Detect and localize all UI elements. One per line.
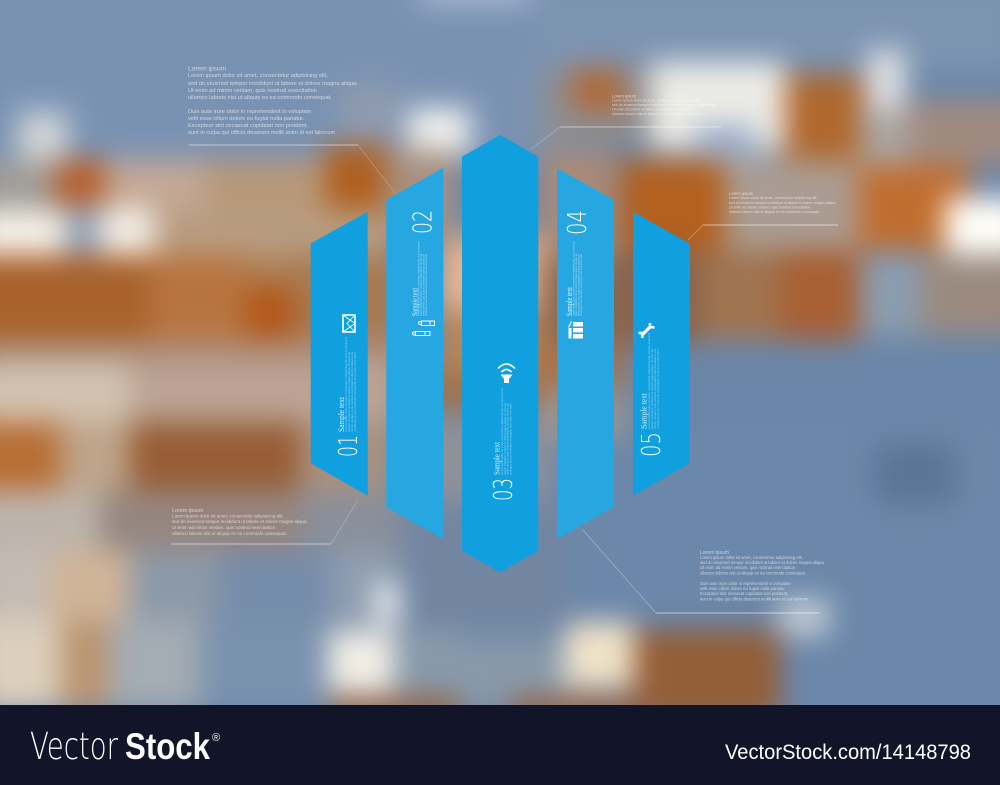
body text 03: minim veniam, quis nostrud exercitation ullamco laboris nisi <box>506 403 510 475</box>
text block: top left: Lorem ipsum <box>188 66 227 72</box>
leader lines <box>171 127 838 613</box>
footer logo: ® <box>212 732 220 744</box>
text block: top left: sunt in culpa qui officia deserunt mollit anim id est laborum <box>188 130 335 136</box>
text block: bottom right: Lorem ipsum <box>700 550 729 556</box>
sample text 01: Sample text <box>337 396 346 432</box>
text block: bottom right: Duis aute irure dolor in reprehenderit in voluptate <box>700 581 791 586</box>
text block: top left: ullamco laboris nisi ut aliquip ex ea commodo consequat. <box>188 95 332 101</box>
text block: right: sed do eiusmod tempor incididunt ut labore et dolore magna aliqua. <box>729 201 836 205</box>
body text 03: tempor incididunt ut labore et dolore magna aliqua. Ut enim ad <box>503 403 507 475</box>
body text 02: Lorem ipsum dolor sit amet, consectetur adipisicing elit, sed do eiusmod <box>416 241 420 316</box>
text block: bottom right: velit esse cillum dolore eu fugiat nulla pariatur. <box>700 586 786 591</box>
sample text 03: Sample text <box>492 441 502 475</box>
text block: bottom left: Lorem ipsum dolor sit amet, consectetur adipisicing elit, <box>172 514 284 518</box>
icon: bar stack <box>568 321 583 338</box>
number 03: 03 <box>489 478 519 501</box>
text block: top left: Lorem ipsum dolor sit amet, consectetur adipisicing elit, <box>188 73 328 79</box>
footer logo: Stock <box>125 726 210 767</box>
panel: bar 01 <box>311 212 368 496</box>
body text 05: tempor incididunt ut labore et dolore magna aliqua. Ut enim ad <box>650 349 654 429</box>
icon: wireless signal <box>498 364 515 383</box>
body text 04: tempor incididunt ut labore et dolore magna aliqua. Ut enim ad <box>574 254 578 316</box>
panel: bar 02 <box>386 168 443 539</box>
text block: bottom left: ullamco laboris nisi ut aliquip ex ea commodo consequat. <box>172 531 287 536</box>
sample text 02: Sample text <box>410 287 419 316</box>
body text 05: ut aliquip ex ea commodo consequat. Duis aute irure dolor <box>656 349 660 429</box>
panel: bar 05 <box>633 212 690 496</box>
text block: bottom right: sunt in culpa qui officia deserunt mollit anim id est laborum <box>700 596 809 602</box>
text block: bottom right: ullamco laboris nisi ut aliquip ex ea commodo consequat. <box>700 570 806 576</box>
body text 04: minim veniam, quis nostrud exercitation ullamco laboris nisi <box>576 254 580 316</box>
body text 03: ut aliquip ex ea commodo consequat. Duis aute irure dolor <box>508 403 512 475</box>
sample text 05: Sample text <box>640 392 648 429</box>
body text 02 <box>416 241 428 316</box>
text block: top left <box>188 66 358 136</box>
text block: top middle: ullamco laboris nisi ut aliquip ex ea commodo consequat. <box>612 112 703 116</box>
footer image id: VectorStock.com/14148798 <box>725 741 971 764</box>
body text 02: minim veniam, quis nostrud exercitation ullamco laboris nisi <box>422 254 426 316</box>
footer bar <box>0 705 1000 785</box>
body text 03 <box>500 388 512 475</box>
body text 04 <box>572 241 583 316</box>
text block: right: Lorem ipsum <box>729 191 754 196</box>
number 05: 05 <box>637 432 667 457</box>
text block: bottom right: Ut enim ad minim veniam, quis nostrud exercitation <box>700 565 796 570</box>
text block: right: ullamco laboris nisi ut aliquip ex ea commodo consequat. <box>729 210 820 214</box>
body text 01: minim veniam, quis nostrud exercitation ullamco laboris nisi <box>350 352 354 432</box>
text block: top left: Excepteur sint occaecat cupidatat non proident, <box>188 123 308 129</box>
text block: bottom left: Ut enim ad minim veniam, quis nostrud exercitation <box>172 525 276 530</box>
text block: bottom left: Lorem ipsum <box>172 508 204 514</box>
text block: top left: Duis aute irure dolor in reprehenderit in voluptate <box>188 109 311 115</box>
footer logo <box>30 725 220 768</box>
text block: right: Ut enim ad minim veniam, quis nostrud exercitation <box>729 206 810 210</box>
panel: bar 03 <box>462 135 538 572</box>
footer logo: Vector <box>30 725 119 768</box>
text block: right <box>729 191 836 214</box>
text block: right: Lorem ipsum dolor sit amet, consectetur adipisicing elit, <box>729 196 817 200</box>
text block: top left: Ut enim ad minim veniam, quis nostrud exercitation <box>188 88 317 94</box>
sample text 04: Sample text <box>565 286 574 316</box>
number 02: 02 <box>409 210 439 234</box>
body text 04: Lorem ipsum dolor sit amet, consectetur adipisicing elit, sed do eiusmod <box>572 241 576 316</box>
body text 05: minim veniam, quis nostrud exercitation ullamco laboris nisi <box>653 349 657 429</box>
body text 03: Lorem ipsum dolor sit amet, consectetur adipisicing elit, sed do eiusmod <box>500 388 504 475</box>
text block: bottom right: Lorem ipsum dolor sit amet, consectetur adipisicing elit, <box>700 555 803 560</box>
text block: top middle <box>612 94 719 116</box>
body text 01: tempor incididunt ut labore et dolore magna aliqua. Ut enim ad <box>347 352 351 432</box>
body text 05 <box>647 333 660 429</box>
text block: top left: velit esse cillum dolore eu fugiat nulla pariatur. <box>188 116 305 122</box>
text block: top middle: Lorem ipsum dolor sit amet, consectetur adipisicing elit, <box>612 98 700 102</box>
body text 05: Lorem ipsum dolor sit amet, consectetur adipisicing elit, sed do eiusmod <box>647 333 651 429</box>
icon: envelope <box>343 315 355 332</box>
text block: bottom right: Excepteur sint occaecat cupidatat non proident, <box>700 591 788 596</box>
body text 02: ut aliquip ex ea commodo consequat. Duis aute irure dolor <box>424 254 428 316</box>
text block: bottom right: sed do eiusmod tempor incididunt ut labore et dolore magna aliqua. <box>700 560 825 565</box>
number 04: 04 <box>563 210 593 235</box>
number 01: 01 <box>334 435 364 457</box>
icon: people <box>412 321 434 336</box>
body text 01 <box>344 337 357 432</box>
body text 01: ut aliquip ex ea commodo consequat. Duis aute irure dolor <box>353 352 357 432</box>
text block: bottom left: sed do eiusmod tempor incididunt ut labore et dolore magna aliqua. <box>172 519 308 524</box>
text block: top middle: Ut enim ad minim veniam, quis nostrud exercitation <box>612 108 694 112</box>
text block: top left: sed do eiusmod tempor incididunt ut labore et dolore magna aliqua. <box>188 81 358 87</box>
text block: top middle: Lorem ipsum <box>612 94 637 98</box>
text block: bottom left <box>172 508 308 536</box>
text block: bottom right <box>700 550 825 602</box>
text block: top middle: sed do eiusmod tempor incididunt ut labore et dolore magna aliqua. <box>612 103 719 107</box>
panel: bar 04 <box>557 168 614 539</box>
icon: wrench <box>638 323 654 338</box>
body text 01: Lorem ipsum dolor sit amet, consectetur adipisicing elit, sed do eiusmod <box>344 337 348 432</box>
body text 02: tempor incididunt ut labore et dolore magna aliqua. Ut enim ad <box>419 254 423 316</box>
body text 04: ut aliquip ex ea commodo consequat. Duis aute irure dolor <box>579 254 583 316</box>
